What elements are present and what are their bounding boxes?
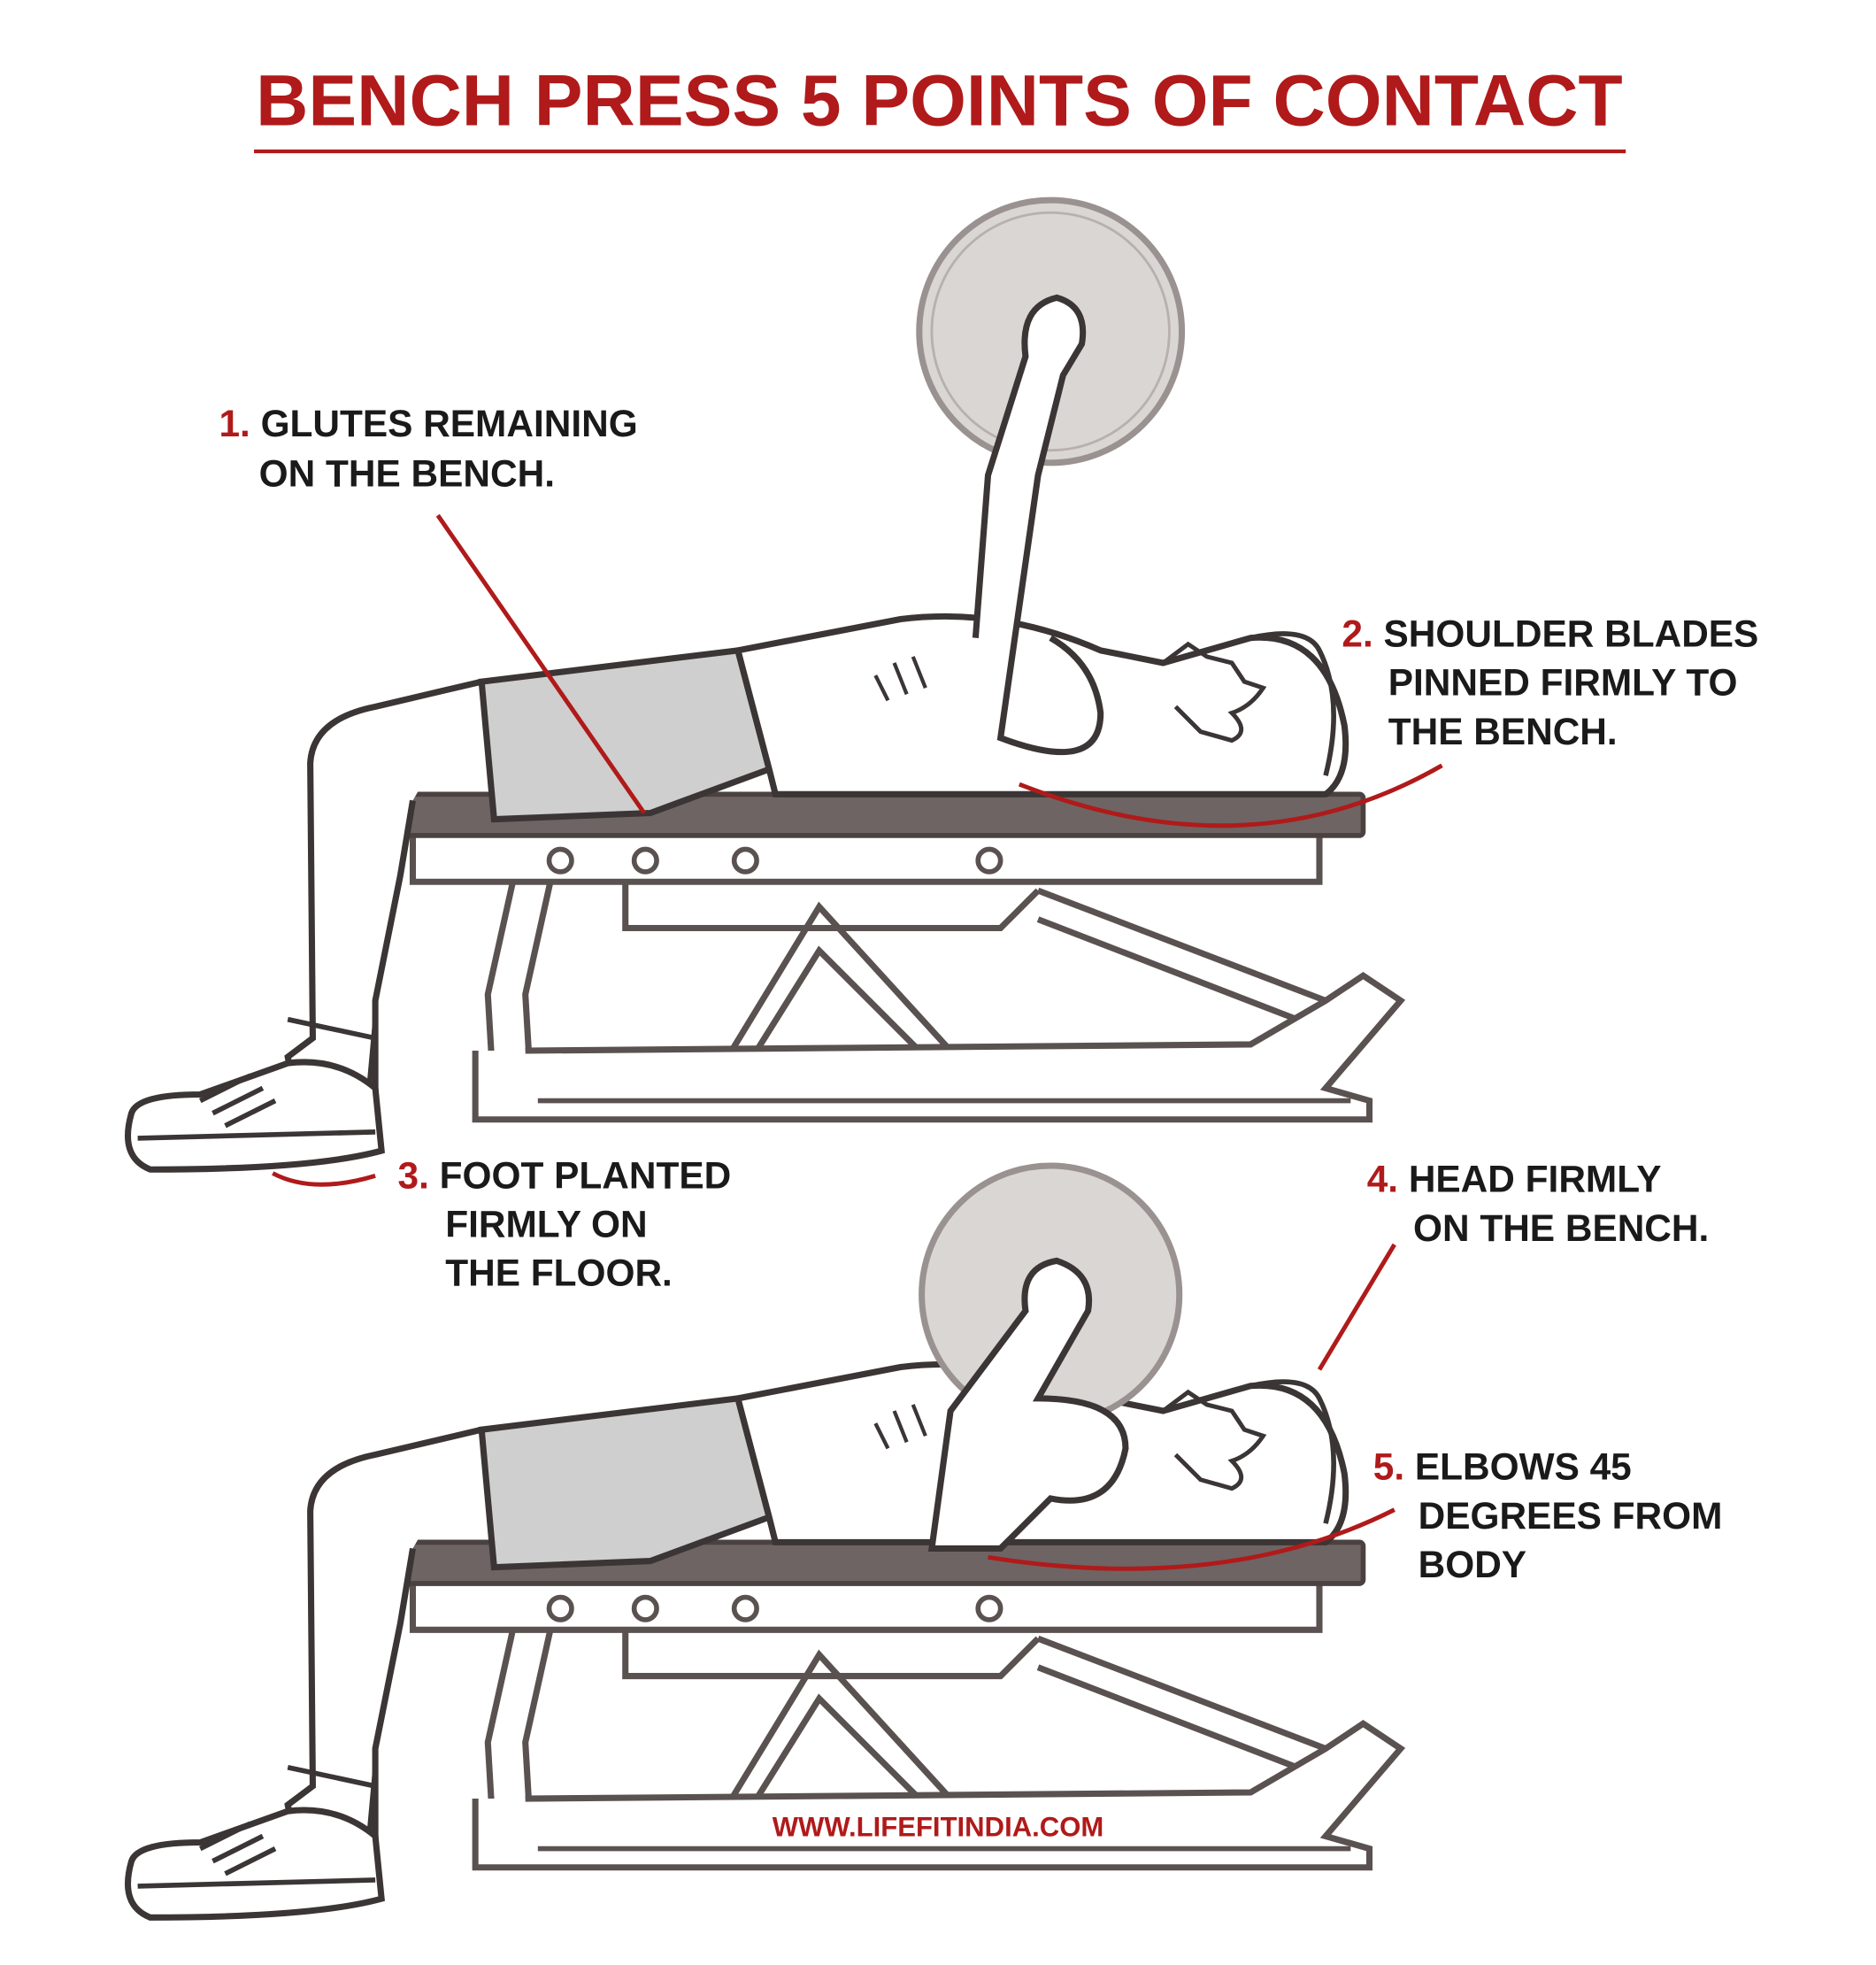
callout lines: [273, 515, 1442, 1568]
label 2: 2. SHOULDER BLADES: [1342, 613, 1758, 655]
label 1: 1. GLUTES REMAINING: [219, 403, 638, 444]
arm bent: [932, 1260, 1126, 1548]
label 5: DEGREES FROM: [1419, 1495, 1722, 1537]
label 2: PINNED FIRMLY TO: [1388, 662, 1738, 704]
label 1: [219, 403, 638, 495]
label 3: FIRMLY ON: [445, 1204, 648, 1245]
arm: [975, 297, 1101, 752]
label 3: [398, 1154, 731, 1294]
label 4: ON THE BENCH.: [1413, 1207, 1709, 1249]
label 1: ON THE BENCH.: [259, 453, 555, 495]
label 4: 4. HEAD FIRMLY: [1367, 1159, 1661, 1200]
figure 2: bench press bottom: [128, 1166, 1401, 1917]
barbell plate: [922, 1166, 1180, 1423]
label 5: 5. ELBOWS 45: [1373, 1446, 1632, 1488]
title: BENCH PRESS 5 POINTS OF CONTACT: [256, 60, 1623, 141]
website footer: WWW.LIFEFITINDIA.COM: [773, 1811, 1103, 1842]
label 4: [1367, 1159, 1709, 1249]
label 3: 3. FOOT PLANTED: [398, 1154, 731, 1196]
label 2: [1342, 613, 1758, 752]
label 2: THE BENCH.: [1388, 711, 1618, 752]
barbell plate: [919, 200, 1182, 463]
figure 1: bench press top: [128, 200, 1401, 1169]
label 5: [1373, 1446, 1722, 1585]
label 5: BODY: [1419, 1544, 1526, 1585]
label 3: THE FLOOR.: [445, 1252, 673, 1294]
